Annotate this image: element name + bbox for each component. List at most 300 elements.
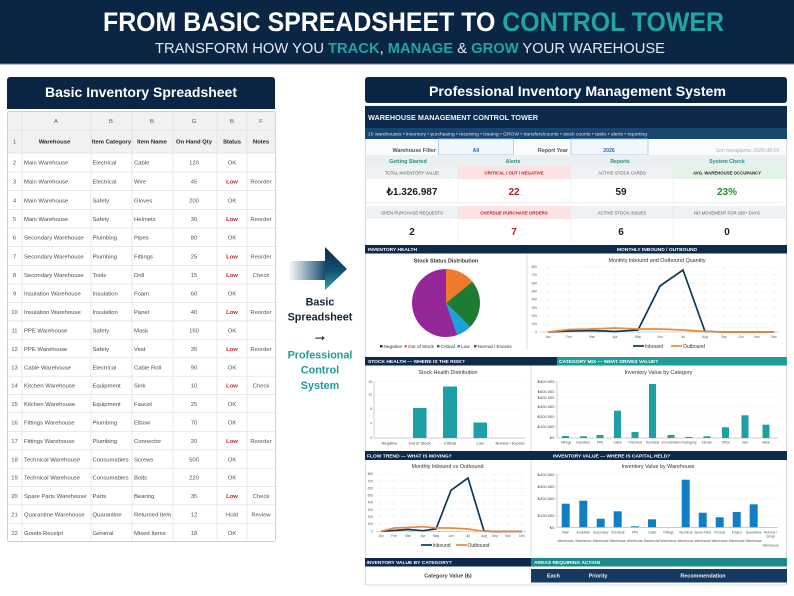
line chart: monthly inbound and outbound quantity: Monthly Inbound and Outbound Quantity (608, 258, 706, 264)
KPI row two: 6 (618, 227, 624, 238)
column letters: B (150, 119, 154, 125)
data rows: Check (253, 273, 269, 279)
data rows: 220 (189, 476, 200, 482)
pie legend: Critical (440, 344, 455, 349)
line chart: monthly inbound and outbound quantity: Apr (613, 335, 618, 339)
navigation tabs: Alerts (506, 159, 520, 165)
bar chart: inventory value by category: Cable (613, 440, 622, 444)
data rows: 12 (191, 512, 197, 518)
navigation tabs: Reports (610, 159, 630, 165)
line chart: monthly inbound and outbound quantity: Dec (771, 335, 777, 339)
data rows: Secondary Warehouse (24, 273, 84, 279)
data rows: Spare Parts Warehouse (24, 494, 87, 500)
data rows: OK (228, 531, 236, 537)
pie legend (380, 344, 512, 349)
line chart: monthly inbound vs outbound: Sep (492, 534, 498, 538)
bar chart: inventory value by category: Chemical (628, 440, 642, 444)
line chart: monthly inbound vs outbound: 600 (368, 486, 373, 490)
KPI row one: AVG. WAREHOUSE OCCUPANCY (693, 170, 761, 176)
line chart: monthly inbound and outbound quantity: Jun (657, 335, 663, 339)
line chart: monthly inbound vs outbound: 700 (368, 480, 373, 484)
line chart: monthly inbound and outbound quantity: 200 (532, 314, 537, 318)
line chart: monthly inbound vs outbound: 500 (368, 494, 373, 498)
data rows: 70 (191, 420, 198, 426)
data rows: OK (228, 402, 236, 408)
data rows: OK (228, 161, 236, 167)
column letters (54, 119, 263, 125)
data rows: General (92, 531, 113, 537)
bar chart: inventory value by warehouse: ₺0 (550, 525, 555, 530)
section bar: inventory value by category (365, 558, 531, 566)
section bar: stock health and category mix: STOCK HEALTH — WHERE IS THE RISK? (368, 359, 465, 365)
data rows: 150 (189, 328, 200, 334)
bar chart: inventory value by warehouse: Warehouse (695, 539, 711, 543)
line chart: monthly inbound vs outbound: Nov (505, 534, 511, 538)
data rows: OK (228, 365, 236, 371)
subtitle text: TRANSFORM HOW YOU TRACK, MANAGE & GROW YOUR WAREHOUSE (155, 41, 665, 57)
transition label: Control (301, 364, 339, 376)
bar chart: inventory value by category: Packaging (682, 440, 697, 444)
data rows: Mask (134, 328, 148, 334)
data rows (11, 161, 272, 537)
bar chart: inventory value by warehouse: Warehouse (746, 539, 762, 543)
data rows: Goods Receipt (24, 531, 63, 537)
line chart: monthly inbound vs outbound: Jul (466, 534, 470, 538)
line chart: monthly inbound vs outbound: Dec (519, 534, 525, 538)
data rows: 35 (191, 347, 198, 353)
data rows: Tools (92, 273, 106, 279)
data rows: Electrical (92, 365, 116, 371)
pie chart: stock status distribution: Stock Status Distribution (414, 258, 478, 264)
chart legend: Outbound (468, 543, 490, 549)
data rows: Low (226, 179, 238, 185)
chart legend: Inbound (645, 344, 663, 350)
line chart: monthly inbound and outbound quantity: Oct (739, 335, 744, 339)
data rows: OK (228, 292, 236, 298)
data rows: 16 (11, 420, 18, 426)
bar chart: inventory value by warehouse: Warehouse (610, 539, 626, 543)
bar chart: inventory value by category (537, 370, 778, 444)
data rows: Secondary Warehouse (24, 254, 84, 260)
chart legend: Outbound (683, 344, 705, 350)
data rows: Kitchen Warehouse (24, 384, 76, 390)
data rows: 80 (191, 236, 198, 242)
section bar: flow trend and inventory value (365, 451, 787, 460)
data rows: Wire (134, 179, 147, 185)
data rows: Plumbing (92, 420, 117, 426)
header row: Item Category (92, 140, 132, 146)
filter row: Report Year (538, 148, 569, 154)
line chart: monthly inbound vs outbound: 800 (368, 472, 373, 476)
bar chart: inventory value by warehouse: Fittings (663, 530, 674, 534)
dashboard title bar (365, 106, 787, 128)
bar chart: inventory value by category: ₺100.000 (537, 424, 555, 429)
data rows: Plumbing (92, 236, 117, 242)
transition label: → (312, 328, 328, 344)
data rows: 9 (13, 292, 16, 298)
data rows: Plumbing (92, 439, 117, 445)
bar chart: inventory value by category: ₺600.000 (537, 389, 555, 394)
line chart: monthly inbound vs outbound: Monthly Inbound vs Outbound (412, 464, 483, 470)
data rows: Low (226, 439, 238, 445)
data rows: 500 (189, 457, 200, 463)
data rows: Reorder (250, 217, 272, 223)
column letters: B (230, 119, 234, 125)
data rows: Low (226, 254, 238, 260)
chart legend: Inbound (432, 543, 451, 549)
data rows: OK (228, 420, 236, 426)
bar chart: inventory value by warehouse: Quarantine (746, 530, 762, 534)
bar chart: inventory value by warehouse: Returns / (764, 530, 777, 534)
line chart: monthly inbound and outbound quantity: 600 (532, 282, 537, 286)
line chart: monthly inbound vs outbound: Jan (378, 534, 384, 538)
data rows: 20 (11, 494, 18, 500)
data rows: 10 (191, 384, 198, 390)
table stub: category value: Category Value (₺) (424, 574, 472, 580)
bar chart: inventory value by warehouse: Warehouse (729, 539, 745, 543)
data rows: Reorder (250, 347, 272, 353)
line chart: monthly inbound vs outbound (368, 464, 526, 549)
bar chart: inventory value by warehouse: Secondary (593, 530, 609, 534)
bar chart: inventory value by warehouse: Main (562, 530, 569, 534)
data rows: Insulation Warehouse (24, 292, 81, 298)
data rows: Quarantine (92, 512, 122, 518)
bar chart: inventory value by warehouse: Warehouse (593, 539, 609, 543)
data rows: 18 (191, 531, 198, 537)
data rows: 200 (189, 198, 200, 204)
data rows: Safety (92, 347, 109, 353)
table header: areas requiring action: Recommendation (680, 574, 726, 580)
data rows: Faucet (134, 402, 152, 408)
bar chart: inventory value by category: Gas (742, 440, 748, 444)
data rows: Pipes (134, 236, 149, 242)
bar chart: inventory value by warehouse: ₺400.000 (537, 472, 555, 477)
line chart: monthly inbound and outbound quantity: 300 (532, 306, 537, 310)
data rows: Main Warehouse (24, 198, 69, 204)
KPI row one: CRITICAL / OUT / NEGATIVE (484, 170, 544, 176)
bar chart: stock health distribution: 0 (370, 436, 372, 440)
line chart: monthly inbound and outbound quantity: 0 (535, 330, 537, 334)
data rows: Technical Warehouse (24, 476, 81, 482)
data rows: 21 (11, 512, 18, 518)
line chart: monthly inbound vs outbound: 300 (368, 508, 373, 512)
data rows: Low (226, 347, 238, 353)
data rows: OK (228, 236, 236, 242)
column letters: G (192, 119, 197, 125)
KPI row one (366, 166, 786, 202)
header banner (0, 0, 794, 64)
header row: 1 (13, 140, 16, 146)
data rows: 25 (191, 254, 198, 260)
data rows: OK (228, 328, 236, 334)
bar chart: inventory value by warehouse: Warehouse (660, 539, 677, 543)
KPI row two: ACTIVE STOCK ISSUES (598, 210, 646, 216)
data rows: Low (226, 217, 238, 223)
data rows: 4 (13, 198, 17, 204)
navigation tabs: System Check (709, 159, 745, 165)
data rows: 3 (13, 179, 17, 185)
KPI row two: 7 (511, 227, 517, 238)
panel: basic spreadsheet heading: Basic Inventory Spreadsheet (45, 84, 237, 100)
bar chart: stock health distribution: Negative (382, 440, 398, 446)
transition label: Spreadsheet (288, 312, 353, 324)
section bar: areas requiring action: AREAS REQUIRING ACTION (534, 560, 601, 566)
bar chart: inventory value by warehouse: Warehouse (678, 539, 694, 543)
data rows: Kitchen Warehouse (24, 402, 76, 408)
bar chart: inventory value by category: Kitchen (702, 440, 713, 444)
data rows: Low (226, 384, 238, 390)
line chart: monthly inbound and outbound quantity: Aug (702, 335, 708, 339)
bar chart: inventory value by warehouse: ₺300.000 (537, 484, 555, 489)
data rows: Insulation (92, 310, 118, 316)
bar chart: inventory value by warehouse: Warehouse (575, 539, 592, 543)
bar chart: inventory value by warehouse: Spare Parts (694, 530, 712, 534)
column letters: B (109, 119, 113, 125)
header row: Item Name (137, 140, 168, 146)
section bar: stock health and category mix (365, 357, 787, 366)
panel: professional system heading (365, 77, 787, 103)
bar chart: inventory value by warehouse: ₺100.000 (537, 513, 555, 518)
data rows: Low (226, 310, 238, 316)
section bar: inventory health and monthly: MONTHLY INBOUND / OUTBOUND (617, 247, 698, 253)
data rows: 15 (191, 273, 198, 279)
section bar: inventory health and monthly: INVENTORY HEALTH (368, 247, 417, 253)
KPI row one: 22 (508, 187, 520, 198)
data rows: Electrical (92, 179, 116, 185)
KPI row one: TOTAL INVENTORY VALUE (385, 170, 439, 176)
bar chart: stock health distribution: 4 (370, 422, 372, 426)
KPI row one: 59 (615, 187, 627, 198)
bar chart: inventory value by category: Technical (646, 440, 659, 444)
pie legend: Out of Stock (408, 344, 434, 349)
KPI row one: ₺1.326.987 (386, 187, 438, 198)
data rows: Check (253, 494, 269, 500)
data rows: Reorder (250, 179, 272, 185)
filter row: 2026 (603, 148, 615, 154)
bar chart: inventory value by warehouse: Scrap (766, 534, 775, 538)
navigation tabs (366, 155, 786, 166)
data rows: Cable Roll (134, 365, 161, 371)
data rows: Equipment (92, 384, 121, 390)
data rows: 13 (11, 365, 18, 371)
section bar: inventory health and monthly (365, 245, 787, 254)
bar chart: inventory value by warehouse: ₺200.000 (537, 496, 555, 501)
data rows: 90 (191, 365, 198, 371)
transition label: Basic (306, 296, 334, 308)
data rows: 25 (191, 402, 198, 408)
data rows: 8 (13, 273, 17, 279)
data rows: Fittings (134, 254, 153, 260)
data rows: Elbow (134, 420, 151, 426)
header row: Warehouse (39, 140, 71, 146)
data rows: 40 (191, 310, 198, 316)
data rows: Drill (134, 273, 144, 279)
data rows: Bolts (134, 476, 147, 482)
bar chart: inventory value by warehouse: Product (714, 530, 725, 534)
bar chart: stock health distribution: 16 (368, 380, 372, 384)
data rows: Helmets (134, 217, 156, 223)
data rows: Main Warehouse (24, 161, 69, 167)
data rows: Safety (92, 217, 109, 223)
data rows: Screws (134, 457, 153, 463)
section bar: inventory value by category: INVENTORY VALUE BY CATEGORY? (366, 560, 452, 566)
data rows: 17 (11, 439, 18, 445)
bar chart: inventory value by category: ₺800.000 (537, 379, 555, 384)
data rows: Safety (92, 198, 109, 204)
transition label: Professional (288, 350, 352, 362)
header row: Notes (253, 140, 270, 146)
header row (13, 140, 270, 146)
bar chart: inventory value by category: Metal (762, 440, 770, 444)
data rows: 14 (11, 384, 18, 390)
data rows: 2 (13, 161, 16, 167)
dashboard subtitle bar: 15 warehouses • inventory • purchasing • receiving • issuing • GROW • transfers/counts • stock counts • tasks • alerts • reporting (368, 132, 647, 136)
bar chart: inventory value by category: ₺500.000 (537, 395, 555, 400)
data rows: Electrical (92, 161, 116, 167)
line chart: monthly inbound and outbound quantity: Jul (681, 335, 685, 339)
KPI row two: OPEN PURCHASE REQUESTS (381, 210, 443, 216)
bar chart: inventory value by warehouse: Warehouse (762, 544, 779, 548)
section bar: areas requiring action (531, 558, 787, 566)
bar chart: stock health distribution: 12 (368, 392, 372, 396)
data rows: 60 (191, 292, 198, 298)
KPI row two: 0 (724, 227, 730, 238)
data rows: Plumbing (92, 254, 117, 260)
transition label: System (301, 380, 339, 392)
data rows: 18 (11, 457, 18, 463)
data rows: 30 (191, 217, 198, 223)
data rows: Sink (134, 384, 146, 390)
data rows: Quarantine Warehouse (24, 512, 85, 518)
column letters: A (54, 119, 58, 125)
bar chart: inventory value by category: Insulation (576, 440, 590, 444)
KPI row one: ACTIVE STOCK CARDS (598, 170, 646, 176)
bar chart: inventory value by warehouse (537, 464, 779, 548)
line chart: monthly inbound vs outbound: 200 (368, 515, 373, 519)
bar chart: stock health distribution: Out of Stock (408, 440, 431, 446)
line chart: monthly inbound and outbound quantity: Feb (566, 335, 572, 339)
data rows: Secondary Warehouse (24, 236, 84, 242)
line chart: monthly inbound vs outbound: Mar (405, 534, 412, 538)
bar chart: inventory value by category: Consumables (661, 440, 681, 444)
bar chart: inventory value by warehouse: Warehouse (644, 539, 660, 543)
header row: Status (223, 140, 242, 146)
data rows: 22 (11, 531, 18, 537)
data rows: Low (226, 494, 238, 500)
bar chart: stock health distribution: Normal / Excess (495, 440, 525, 446)
arrow: spreadsheet to system (288, 247, 347, 290)
data rows: Consumables (92, 457, 129, 463)
data rows: 19 (11, 476, 18, 482)
data rows: Review (251, 512, 271, 518)
pie legend: Negative (384, 344, 402, 349)
line chart: monthly inbound vs outbound: 0 (371, 530, 373, 534)
line chart: monthly inbound and outbound quantity: Mar (589, 335, 596, 339)
data rows: Reorder (250, 254, 272, 260)
line chart: monthly inbound and outbound quantity: May (635, 335, 641, 339)
filter row: Son hesaplama: 2026-08-16 (716, 148, 779, 154)
line chart: monthly inbound and outbound quantity: 100 (532, 322, 537, 326)
dashboard subtitle bar (365, 128, 787, 139)
data rows: 20 (191, 439, 198, 445)
pie legend: Low (461, 344, 470, 349)
data rows: Insulation (92, 292, 118, 298)
bar chart: inventory value by warehouse: Project (732, 530, 742, 534)
data rows: Main Warehouse (24, 217, 69, 223)
line chart: monthly inbound and outbound quantity: 700 (532, 273, 537, 277)
data rows: Returned Item (134, 512, 171, 518)
data rows: Cable Warehouse (24, 365, 72, 371)
KPI row two: NO MOVEMENT FOR 180+ DAYS (694, 210, 760, 216)
data rows: Cable (134, 161, 150, 167)
data rows: Mixed Items (134, 531, 166, 537)
panel: spreadsheet table (7, 111, 276, 542)
table header: areas requiring action (531, 569, 787, 582)
line chart: monthly inbound and outbound quantity (532, 258, 779, 350)
data rows: 6 (13, 236, 17, 242)
data rows: OK (228, 476, 236, 482)
bar chart: inventory value by category: Office (722, 440, 730, 444)
bar chart: inventory value by warehouse: Inventory Value by Warehouse (621, 464, 695, 470)
pie legend: Normal / Excess (478, 344, 512, 349)
bar chart: stock health distribution: Low (476, 440, 484, 446)
filter row (366, 139, 786, 155)
data rows: 15 (11, 402, 18, 408)
bar chart: inventory value by warehouse: Cable (648, 530, 656, 534)
line chart: monthly inbound and outbound quantity: Nov (754, 335, 760, 339)
data rows: 45 (191, 179, 198, 185)
KPI row two: OVERDUE PURCHASE ORDERS (480, 210, 548, 216)
line chart: monthly inbound vs outbound: Jun (448, 534, 454, 538)
transition label (288, 296, 353, 392)
line chart: monthly inbound vs outbound: Apr (421, 534, 426, 538)
pie chart: stock status distribution (380, 258, 512, 349)
bar chart: inventory value by warehouse: Warehouse (558, 539, 574, 543)
panel: dashboard (365, 106, 787, 585)
bar chart: inventory value by warehouse: PPE (632, 530, 638, 534)
KPI row two: 2 (409, 227, 415, 238)
bar chart: inventory value by category: ₺0 (550, 435, 555, 440)
data rows: 7 (13, 254, 16, 260)
data rows: PPE Warehouse (24, 347, 68, 353)
line chart: monthly inbound vs outbound: May (433, 534, 439, 538)
data rows: Insulation Warehouse (24, 310, 81, 316)
panel: basic spreadsheet heading (7, 77, 275, 109)
data rows: PPE Warehouse (24, 328, 68, 334)
data rows: Technical Warehouse (24, 457, 81, 463)
line chart: monthly inbound and outbound quantity: Jan (545, 335, 551, 339)
header row: On Hand Qty (176, 140, 213, 146)
line chart: monthly inbound vs outbound: Aug (481, 534, 487, 538)
section bar: flow trend and inventory value: FLOW TREND — WHAT IS MOVING? (367, 454, 452, 460)
data rows: OK (228, 457, 236, 463)
line chart: monthly inbound and outbound quantity: 800 (532, 265, 537, 269)
bar chart: inventory value by category: Fittings (561, 440, 572, 444)
KPI row one: 23% (717, 187, 737, 198)
bar chart: stock health distribution: 8 (370, 407, 372, 411)
data rows: 5 (13, 217, 17, 223)
data rows: Reorder (250, 439, 272, 445)
title: FROM BASIC SPREADSHEET TO CONTROL TOWER (103, 7, 724, 37)
table header: areas requiring action: Priority (589, 574, 607, 580)
data rows: Connector (134, 439, 161, 445)
dashboard title bar: WAREHOUSE MANAGEMENT CONTROL TOWER (368, 113, 539, 122)
table header: areas requiring action: Each (547, 574, 560, 580)
data rows: Check (253, 384, 269, 390)
data rows: 35 (191, 494, 198, 500)
KPI row two (366, 206, 786, 242)
bar chart: inventory value by warehouse: Chemical (611, 530, 625, 534)
